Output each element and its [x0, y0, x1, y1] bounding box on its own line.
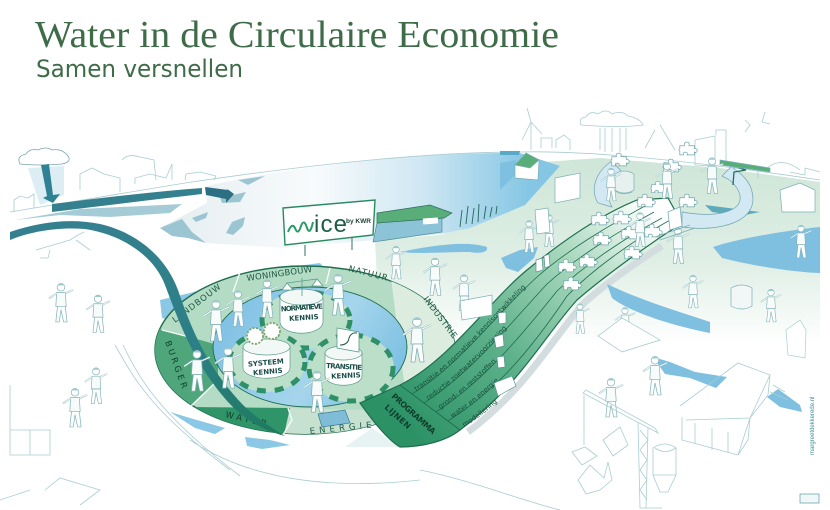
- ring segment: industrie: [391, 281, 454, 382]
- ring base: [155, 266, 455, 434]
- ponds: [400, 160, 820, 412]
- ring divisions: [162, 268, 330, 435]
- reeds: [460, 204, 497, 227]
- construction site: building blocks, crane, silo: [572, 363, 788, 508]
- lane labels: modellering: [462, 400, 498, 427]
- gear: systeem kennis: SYSTEEM: [248, 357, 284, 369]
- blue surroundings of ring: [160, 263, 325, 449]
- gear: systeem kennis: KENNIS: [253, 367, 283, 377]
- ring labels: WONINGBOUW: [246, 265, 315, 284]
- ring labels: INDUSTRIE: [421, 295, 460, 342]
- ribbon: programmalijnen to arrow: [359, 197, 675, 448]
- left industry line art: [14, 156, 216, 212]
- ring segment: burger: [155, 330, 218, 405]
- water streak: [15, 204, 182, 220]
- signature: [800, 494, 819, 503]
- solar panel: [318, 410, 350, 427]
- lane labels: grond- en reststoffen: [438, 360, 496, 410]
- logo wave: [288, 222, 313, 232]
- land: pale green polder: [375, 158, 820, 345]
- lane labels: transitie en normatieve kennisontwikkeling: [414, 285, 526, 390]
- ribbon lane lines: [412, 206, 672, 421]
- ring labels: NATUUR: [347, 264, 390, 284]
- arrow: flow along horizon: [52, 188, 202, 212]
- gear: transitie kennis: TRANSITIE: [326, 362, 362, 372]
- gear: normatieve kennis: NORMATIEVE: [281, 303, 323, 313]
- puzzle pieces: [558, 142, 697, 290]
- lab table: [460, 295, 492, 320]
- crack lines: [36, 232, 90, 258]
- sea and horizon band: [160, 153, 560, 248]
- flipchart: [535, 208, 550, 234]
- people around the landscape: [49, 158, 811, 427]
- ring: stakeholders: [154, 265, 455, 435]
- ring labels: [162, 264, 460, 437]
- return flow arrow: right circle: [682, 166, 753, 228]
- ring labels: ENERGIE: [309, 420, 374, 437]
- rain: [28, 166, 64, 205]
- desk with laptop: [655, 207, 695, 240]
- ribbon shadow: [468, 246, 662, 432]
- floor plan sheet: [598, 318, 660, 352]
- wall pieces far right: [786, 320, 806, 358]
- ring segment: energie: [284, 408, 376, 434]
- illustrator credit: margreetdekkerede.nl: [810, 397, 816, 455]
- lane icons: [494, 254, 550, 396]
- ring segment: water: [195, 407, 290, 433]
- lane labels: reductie zoetwatervoorziening: [426, 326, 507, 400]
- left coast blotches: [160, 176, 265, 243]
- arrow head: return flow: [732, 166, 746, 185]
- gear: transitie kennis: [308, 328, 394, 402]
- gear: normatieve kennis: [261, 278, 351, 349]
- river: teal stream into ring: [10, 221, 285, 436]
- programma lijnen label: LIJNEN: [383, 403, 412, 431]
- programma lijnen label: PROGRAMMA: [390, 392, 438, 436]
- logo word: ice: [314, 211, 347, 238]
- horizon line: [10, 152, 820, 212]
- right horizon: city, wind turbine, clouds: [522, 108, 820, 178]
- title: Water in de Circulaire Economie: [35, 14, 559, 56]
- lane labels: water en energie: [450, 379, 498, 418]
- building: [373, 205, 452, 242]
- barrel and silo right: [731, 285, 752, 309]
- logo by kwr: by KWR: [346, 218, 371, 225]
- ring labels: BURGER: [162, 340, 189, 392]
- bottom left sketches: [0, 345, 560, 510]
- people in the ring: [184, 274, 431, 412]
- return flow arrow: left arc: [594, 161, 622, 207]
- gear: systeem kennis: [228, 323, 306, 392]
- gear: transitie kennis: KENNIS: [331, 371, 361, 381]
- billboard: wice by kwr: [283, 200, 375, 256]
- subtitle: Samen versnellen: [36, 55, 243, 83]
- ring labels: LANDBOUW: [171, 281, 225, 325]
- rain barrel: [615, 171, 634, 193]
- ring labels: WATER: [224, 410, 269, 430]
- programma block divider: [400, 385, 460, 430]
- teal lake edge: [500, 151, 520, 155]
- cloud left: [19, 148, 69, 165]
- greenhouse and sheds: [515, 153, 815, 212]
- arrow: rain down: [41, 164, 60, 203]
- inner water pool: [213, 287, 407, 407]
- gear: normatieve kennis: KENNIS: [289, 313, 319, 323]
- white patch under energie: [345, 428, 400, 447]
- arrow head: flow into sea: [205, 187, 234, 203]
